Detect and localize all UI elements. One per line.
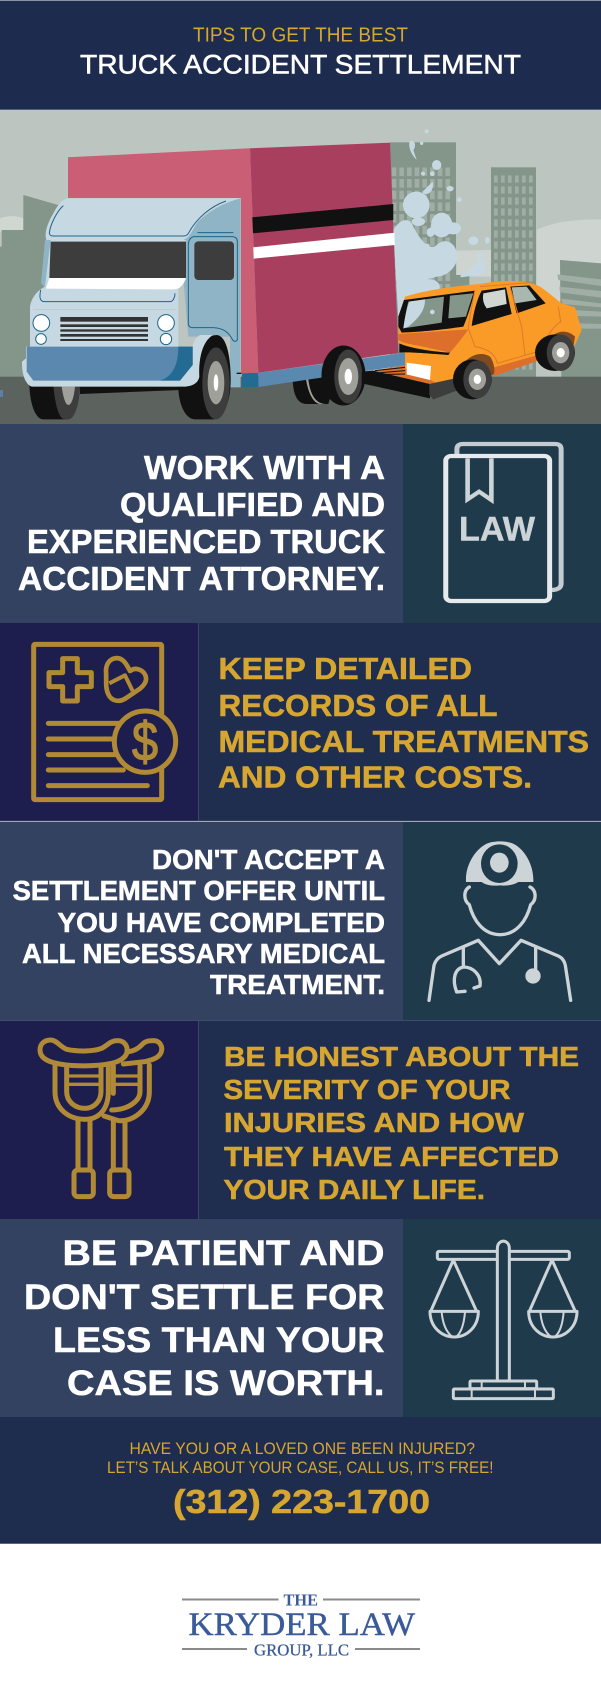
- call to action text: LET’S TALK ABOUT YOUR CASE, CALL US, IT’S FREE!: [107, 1458, 494, 1477]
- tip 4 text: YOUR DAILY LIFE.: [224, 1174, 485, 1205]
- tip 3 text: [13, 844, 385, 1000]
- tip 2 text: RECORDS OF ALL: [218, 689, 498, 723]
- tip 1 text: WORK WITH A: [144, 450, 385, 487]
- tip 5 text: BE PATIENT AND: [62, 1233, 384, 1273]
- tip 5 text: DON'T SETTLE FOR: [24, 1277, 384, 1317]
- tip 1 text: EXPERIENCED TRUCK: [27, 524, 385, 561]
- icon: law book: LAW: [459, 511, 536, 549]
- logo: The Kryder Law Group: KRYDER LAW: [188, 1607, 416, 1643]
- icon: medical bill: [34, 644, 176, 800]
- call to action band: [0, 1417, 601, 1544]
- truck rear inner wheel: [293, 375, 337, 404]
- header banner: [0, 0, 601, 110]
- tip 2 text: [218, 652, 589, 794]
- tip 5 text: CASE IS WORTH.: [67, 1363, 384, 1403]
- tip 1 text: ACCIDENT ATTORNEY.: [18, 561, 385, 598]
- tip 5 text: [24, 1233, 384, 1403]
- crashed orange car: [362, 281, 582, 399]
- tip 3 text: SETTLEMENT OFFER UNTIL: [13, 875, 385, 906]
- truck rear outer wheel: [322, 346, 366, 406]
- truck box: [68, 143, 406, 387]
- tip 3 text: DON'T ACCEPT A: [152, 844, 385, 875]
- logo: The Kryder Law Group: [182, 1591, 420, 1660]
- tip 2 text: AND OTHER COSTS.: [218, 760, 532, 794]
- panel: tip 5 patience: [0, 1219, 601, 1417]
- icon: medical bill: $: [132, 711, 158, 773]
- panel: tip 1 attorney: [0, 424, 601, 623]
- header subtitle: TIPS TO GET THE BEST: [193, 25, 408, 47]
- tip 4 text: SEVERITY OF YOUR: [224, 1074, 511, 1105]
- tip 1 text: QUALIFIED AND: [120, 487, 385, 524]
- right city skyline: [390, 142, 601, 379]
- header title: TRUCK ACCIDENT SETTLEMENT: [80, 50, 521, 80]
- icon: doctor: [429, 841, 571, 1000]
- tip 5 text: LESS THAN YOUR: [53, 1320, 384, 1360]
- tip 3 text: YOU HAVE COMPLETED: [58, 907, 385, 938]
- phone number: (312) 223-1700: [173, 1483, 430, 1520]
- tip 1 text: [18, 450, 385, 598]
- tip 3 text: TREATMENT.: [210, 969, 385, 1000]
- tip 4 text: INJURIES AND HOW: [224, 1107, 525, 1138]
- tip 3 text: ALL NECESSARY MEDICAL: [22, 938, 385, 969]
- call to action text: [107, 1439, 494, 1477]
- truck cab with wheels: [22, 198, 241, 419]
- logo: The Kryder Law Group: GROUP, LLC: [254, 1641, 349, 1660]
- panel: tip 4 honesty: [0, 1020, 601, 1219]
- tip 4 text: BE HONEST ABOUT THE: [224, 1041, 579, 1072]
- icon: crutches: [40, 1040, 162, 1197]
- panel: tip 3 settlement offer: [0, 822, 601, 1020]
- tip 2 text: KEEP DETAILED: [218, 652, 472, 686]
- tip 4 text: THEY HAVE AFFECTED: [224, 1141, 559, 1172]
- smoke cloud: [393, 129, 490, 320]
- icon: law book: [446, 444, 561, 601]
- logo: The Kryder Law Group: THE: [284, 1591, 318, 1610]
- tip 2 text: MEDICAL TREATMENTS: [218, 725, 589, 759]
- call to action text: HAVE YOU OR A LOVED ONE BEEN INJURED?: [130, 1439, 475, 1458]
- tip 4 text: [224, 1041, 579, 1205]
- panel: tip 2 records: [0, 623, 601, 822]
- left city skyline: [0, 195, 62, 380]
- hero illustration: truck and car crash: [0, 110, 601, 424]
- icon: scales of justice: [430, 1241, 577, 1399]
